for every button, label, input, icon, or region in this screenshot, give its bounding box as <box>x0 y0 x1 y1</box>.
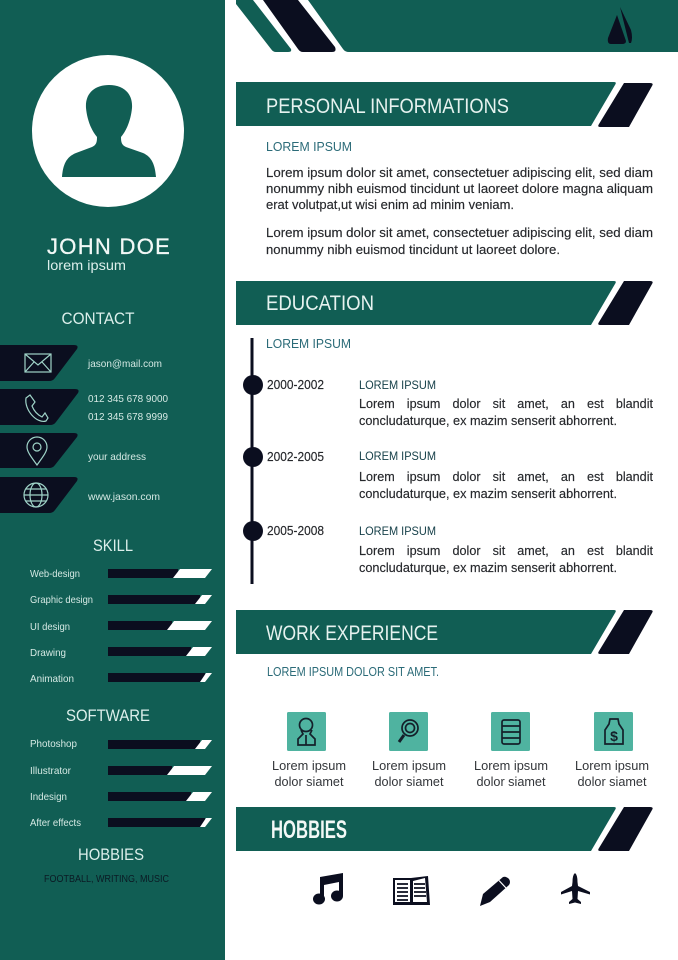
paragraph 2: nonummy nibh euismod tincidunt ut laoreet dolore. <box>266 243 560 257</box>
name: lorem ipsum <box>47 258 126 273</box>
skill bars <box>30 568 212 685</box>
skill: graphic design <box>30 594 212 606</box>
education entry 1: 2000-2002 <box>267 378 324 392</box>
heading: skill: SKILL <box>93 536 133 555</box>
item 2: Lorem ipsum <box>372 759 446 773</box>
skill: animation <box>30 673 212 685</box>
heading: hobbies sidebar: HOBBIES <box>78 845 144 864</box>
education entry 2: concludaturque, ex mazim senserit abhorrent. <box>359 487 617 501</box>
paragraph 1 <box>266 166 653 212</box>
software: illustrator: Illustrator <box>30 765 71 777</box>
item 2: dolor siamet <box>374 775 444 789</box>
profile photo <box>32 55 184 207</box>
contact: address <box>0 433 146 468</box>
item 3: Lorem ipsum <box>474 759 548 773</box>
contact: email <box>0 345 162 381</box>
icon: book <box>393 876 430 905</box>
skill: ui design: UI design <box>30 621 70 633</box>
education entry 1 <box>267 378 654 428</box>
item 4: $ <box>610 728 618 744</box>
header bar: WORK EXPERIENCE <box>266 622 438 645</box>
education entry 3: LOREM IPSUM <box>359 524 436 538</box>
name <box>47 234 171 273</box>
contact: website: www.jason.com <box>87 491 160 503</box>
header bar: HOBBIES <box>271 816 347 844</box>
software: indesign <box>30 791 212 803</box>
education entry 1: LOREM IPSUM <box>359 378 436 392</box>
heading: contact: CONTACT <box>62 309 134 328</box>
contact: address: your address <box>88 451 146 463</box>
contact: phone: 012 345 678 9999 <box>88 411 168 423</box>
paragraph 1: nonummy nibh euismod tincidunt ut laoreet dolore magna aliquam <box>266 182 653 196</box>
header bar <box>236 610 653 654</box>
skill: ui design <box>30 621 212 633</box>
education entry 3: concludaturque, ex mazim senserit abhorrent. <box>359 561 617 575</box>
education entry 2 <box>267 449 654 501</box>
subheading: LOREM IPSUM DOLOR SIT AMET. <box>267 664 439 679</box>
education entry 3: 2005-2008 <box>267 524 324 538</box>
skill: web design <box>30 568 212 580</box>
contact list <box>0 345 168 513</box>
heading: software: SOFTWARE <box>66 706 150 725</box>
paragraph 2: Lorem ipsum dolor sit amet, consectetuer adipiscing elit, sed diam <box>266 226 653 240</box>
skill: animation: Animation <box>30 673 74 685</box>
paragraph 1: Lorem ipsum dolor sit amet, consectetuer adipiscing elit, sed diam <box>266 166 653 180</box>
software: illustrator <box>30 765 212 777</box>
item 1: dolor siamet <box>274 775 344 789</box>
software bars <box>30 738 212 829</box>
software: after effects: After effects <box>30 817 81 829</box>
skill: drawing <box>30 647 212 659</box>
education entry 1: concludaturque, ex mazim senserit abhorrent. <box>359 414 617 428</box>
header bar <box>236 807 653 851</box>
skill: drawing: Drawing <box>30 647 66 659</box>
item 3 <box>474 712 548 789</box>
section: personal informations <box>236 82 653 257</box>
header bar: EDUCATION <box>266 292 374 315</box>
section: hobbies <box>236 807 653 906</box>
education entry 2: 2002-2005 <box>267 450 324 464</box>
header bar <box>236 281 653 325</box>
item 1 <box>272 712 346 789</box>
icon: music <box>313 873 343 904</box>
item 4: dolor siamet <box>578 775 647 789</box>
icon: pencil <box>480 877 510 906</box>
education entry 1: Lorem ipsum dolor sit amet, an est blandit <box>359 397 654 411</box>
section: education <box>236 281 654 584</box>
top banner <box>236 0 678 52</box>
timeline <box>243 338 263 584</box>
item 4: Lorem ipsum <box>575 759 649 773</box>
hobbies list: FOOTBALL, WRITING, MUSIC <box>44 873 169 885</box>
subheading: LOREM IPSUM <box>266 336 351 351</box>
panel: sidebar <box>0 0 225 960</box>
software: indesign: Indesign <box>30 791 67 803</box>
education entry 2: LOREM IPSUM <box>359 449 436 463</box>
subheading: LOREM IPSUM <box>266 139 352 154</box>
item 1: Lorem ipsum <box>272 759 346 773</box>
contact: phone <box>0 389 168 425</box>
paragraph 1: erat volutpat,ut wisi enim ad minim veniam. <box>266 198 514 212</box>
icon: plane <box>561 873 590 904</box>
skill: graphic design: Graphic design <box>30 594 93 606</box>
icon: sail logo <box>608 7 632 44</box>
header bar <box>236 82 653 127</box>
header bar: PERSONAL INFORMATIONS <box>266 95 509 118</box>
name: JOHN DOE <box>47 234 171 259</box>
item 3: dolor siamet <box>476 775 546 789</box>
item 2 <box>372 712 446 789</box>
contact: phone: 012 345 678 9000 <box>88 393 168 405</box>
paragraph 2 <box>266 226 653 257</box>
contact: website <box>0 477 160 513</box>
software: photoshop <box>30 738 212 750</box>
contact: email: jason@mail.com <box>87 358 162 370</box>
software: after effects <box>30 817 212 829</box>
item 4 <box>575 712 649 789</box>
skill: web design: Web-design <box>30 568 80 580</box>
section: work experience <box>236 610 653 789</box>
education entry 3 <box>267 524 654 575</box>
software: photoshop: Photoshop <box>30 738 77 750</box>
education entry 3: Lorem ipsum dolor sit amet, an est blandit <box>359 544 654 558</box>
education entry 2: Lorem ipsum dolor sit amet, an est blandit <box>359 470 654 484</box>
